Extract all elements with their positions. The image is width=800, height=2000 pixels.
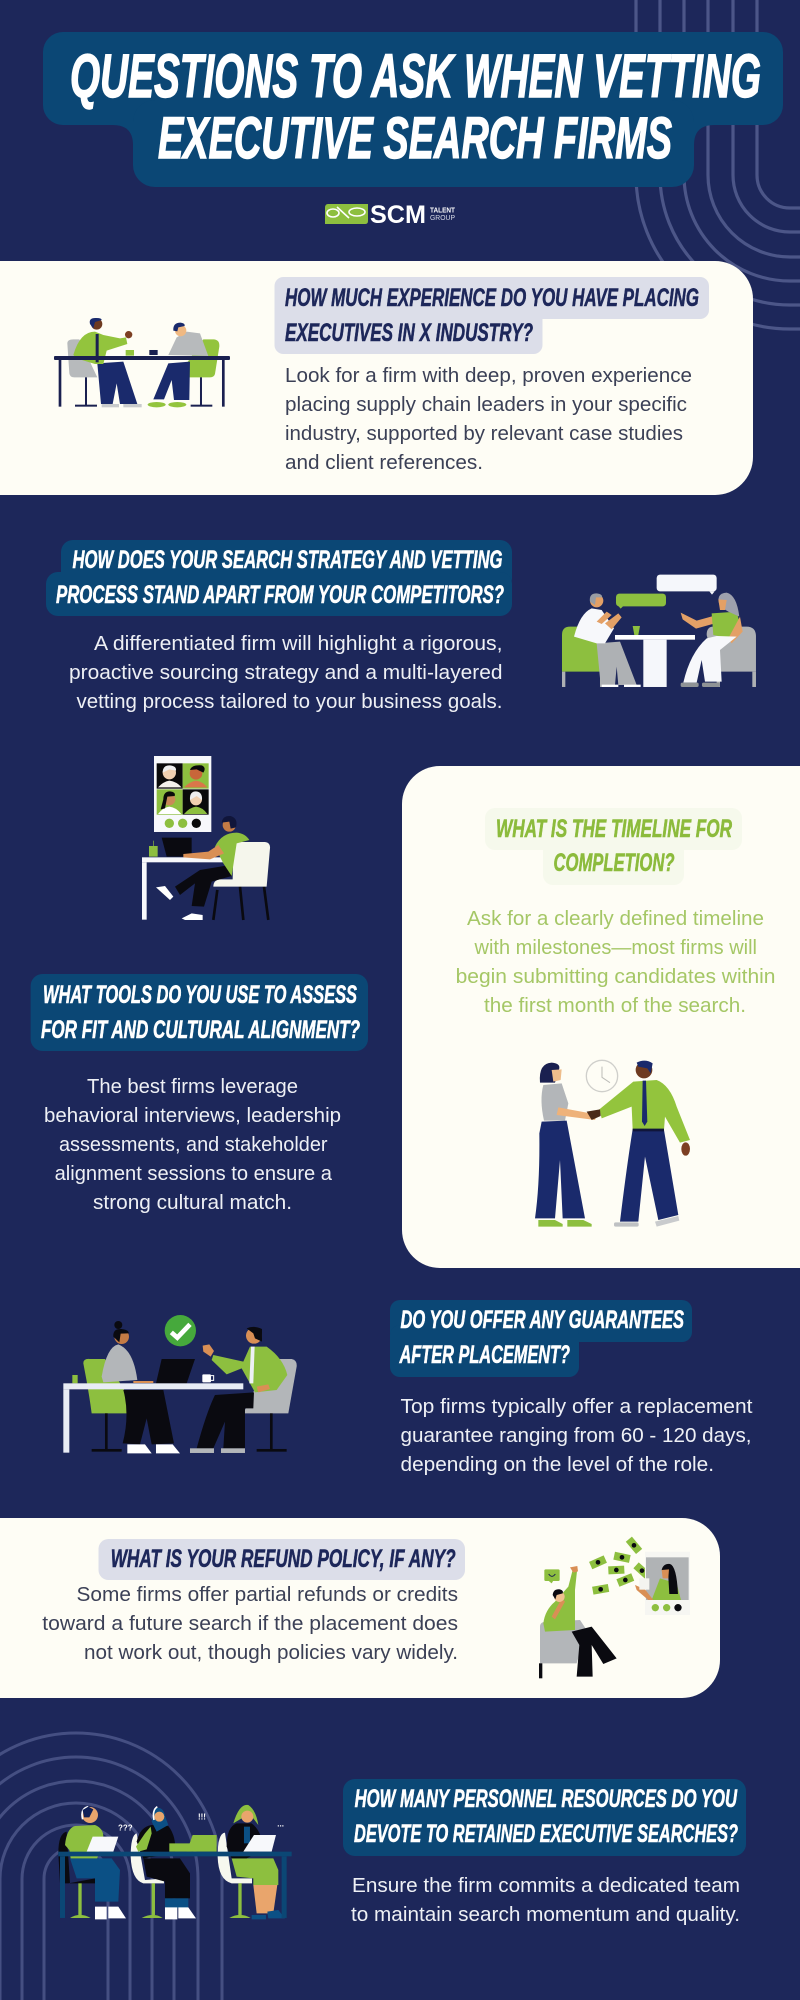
text: experience body: industry, supported by relevant case studies	[285, 423, 683, 445]
heading: search strategy: HOW DOES YOUR SEARCH STRATEGY AND VETTING	[72, 546, 502, 574]
heading: timeline: COMPLETION?	[554, 849, 674, 877]
panel: search strategy	[46, 540, 756, 713]
icon: three colleagues at a desk: !!!	[198, 1812, 206, 1821]
icon: two people talking at a table	[54, 318, 230, 407]
heading: tools	[31, 974, 368, 1051]
logo: SCM	[370, 201, 426, 229]
text: timeline body: the first month of the search.	[484, 995, 746, 1017]
text: tools body	[44, 1076, 341, 1214]
icon: three colleagues at a desk: ???	[118, 1824, 133, 1833]
icon: meeting with check mark	[63, 1315, 297, 1453]
icon: man on a video call	[142, 756, 270, 920]
decorative arcs: bottom left	[0, 1733, 222, 2000]
text: tools body: strong cultural match.	[93, 1192, 292, 1214]
heading: refund policy	[98, 1539, 465, 1580]
text: refund body: Some firms offer partial refunds or credits	[76, 1584, 458, 1606]
panel: experience	[0, 261, 753, 495]
heading: guarantees	[390, 1300, 692, 1377]
text: experience body: and client references.	[285, 452, 483, 474]
text: timeline body: with milestones—most firms will	[473, 937, 757, 959]
heading: guarantees: AFTER PLACEMENT?	[399, 1341, 570, 1369]
text: tools body: alignment sessions to ensure a	[55, 1163, 333, 1185]
text: tools body: assessments, and stakeholder	[59, 1134, 328, 1156]
heading: experience	[274, 277, 709, 354]
text: experience body: placing supply chain leaders in your specific	[285, 394, 687, 416]
text: tools body: behavioral interviews, leadership	[44, 1105, 341, 1127]
text: experience body	[285, 365, 692, 474]
panel: refund policy	[0, 1518, 720, 1698]
text: refund body: toward a future search if the placement does	[42, 1613, 458, 1635]
logo: GROUP	[430, 215, 455, 222]
heading: tools: WHAT TOOLS DO YOU USE TO ASSESS	[43, 981, 357, 1009]
panel: timeline	[402, 766, 800, 1268]
text: timeline body	[456, 908, 776, 1017]
decorative arcs: top right	[636, 0, 800, 329]
text: search strategy body	[69, 633, 502, 713]
heading: timeline	[485, 808, 742, 885]
text: search strategy body: vetting process tailored to your business goals.	[76, 691, 502, 713]
heading: refund policy: WHAT IS YOUR REFUND POLICY, IF ANY?	[111, 1545, 456, 1573]
logo	[325, 201, 456, 229]
text: personnel body	[351, 1875, 740, 1926]
text: personnel body: Ensure the firm commits a dedicated team	[352, 1875, 740, 1897]
logo: TALENT	[430, 208, 456, 214]
text: experience body: Look for a firm with deep, proven experience	[285, 365, 692, 387]
heading: experience: EXECUTIVES IN X INDUSTRY?	[285, 319, 533, 347]
text: tools body: The best firms leverage	[87, 1076, 298, 1098]
text: search strategy body: A differentiated firm will highlight a rigorous,	[94, 633, 502, 655]
text: guarantees body	[400, 1396, 753, 1476]
icon: man catching money on a video call	[539, 1537, 690, 1678]
icon: handshake and clock	[535, 1060, 690, 1227]
heading: search strategy	[46, 540, 512, 616]
text: guarantees body: depending on the level of the role.	[400, 1454, 714, 1476]
heading: personnel resources	[343, 1779, 746, 1856]
text: guarantees body: guarantee ranging from 60 - 120 days,	[400, 1425, 752, 1447]
panel: tools and cultural fit	[31, 756, 368, 1214]
text: refund body	[42, 1584, 458, 1664]
text: timeline body: begin submitting candidates within	[456, 966, 776, 988]
title	[43, 32, 783, 187]
heading: tools: FOR FIT AND CULTURAL ALIGNMENT?	[41, 1016, 360, 1044]
icon: two people in armchairs with speech bubbles	[562, 575, 756, 687]
panel: guarantees	[63, 1300, 753, 1476]
text: personnel body: to maintain search momentum and quality.	[351, 1904, 740, 1926]
icon: three colleagues at a desk: ...	[277, 1820, 284, 1829]
panel: personnel resources	[58, 1779, 746, 1926]
icon: three colleagues at a desk	[58, 1805, 292, 1919]
heading: search strategy: PROCESS STAND APART FROM YOUR COMPETITORS?	[56, 581, 504, 609]
text: refund body: not work out, though policies vary widely.	[84, 1642, 458, 1664]
text: guarantees body: Top firms typically offer a replacement	[400, 1396, 753, 1418]
text: timeline body: Ask for a clearly defined timeline	[467, 908, 764, 930]
text: search strategy body: proactive sourcing strategy and a multi-layered	[69, 662, 502, 684]
